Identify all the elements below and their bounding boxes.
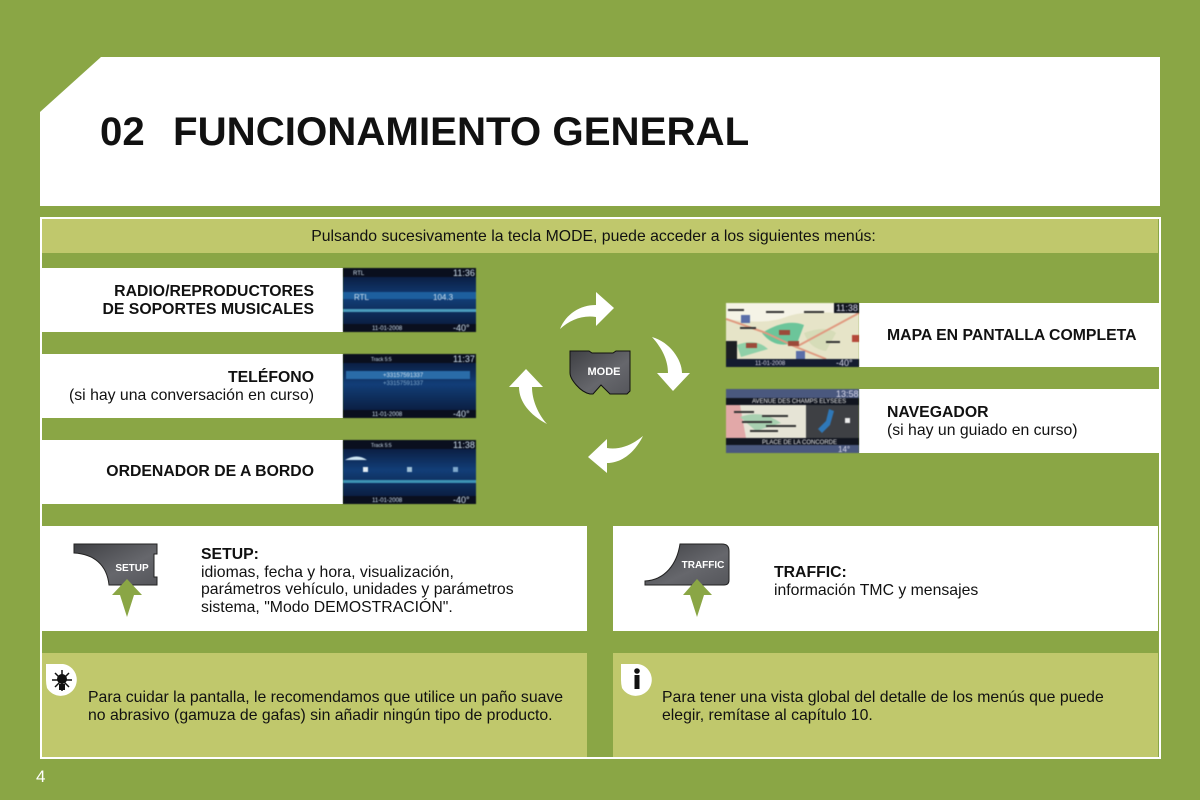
screen: radio: 104.3	[433, 293, 454, 302]
icon: MODE key	[570, 350, 630, 394]
mapa label: MAPA EN PANTALLA COMPLETA	[887, 327, 1137, 344]
ordenador label: ORDENADOR DE A BORDO	[106, 463, 314, 480]
panel: tip info	[613, 653, 1158, 757]
intro strip: Pulsando sucesivamente la tecla MODE, puede acceder a los siguientes menús:	[311, 228, 876, 245]
setup text: sistema, "Modo DEMOSTRACIÓN".	[201, 598, 453, 616]
panel: telefono	[42, 354, 343, 418]
screen: ordenador	[342, 439, 477, 505]
telefono label: TELÉFONO	[228, 369, 314, 386]
traffic text: información TMC y mensajes	[774, 582, 978, 598]
screen: ordenador: Track 5:5	[371, 443, 392, 449]
tip text: no abrasivo (gamuza de gafas) sin añadir ningún tipo de producto.	[88, 706, 553, 724]
icon: MODE key: MODE	[588, 366, 620, 378]
screen: navegador	[725, 388, 860, 454]
screen: navegador: AVENUE DES CHAMPS ELYSEES	[752, 399, 846, 405]
screen: radio: 11-01-2008	[372, 326, 403, 332]
icon: light	[46, 664, 77, 696]
telefono label: (si hay una conversación en curso)	[69, 386, 314, 404]
screen: mapa: 11:38	[836, 303, 858, 313]
panel: setup	[42, 526, 587, 631]
info text	[662, 689, 1104, 724]
setup text: parámetros vehículo, unidades y parámetros	[201, 581, 514, 598]
screen: ordenador: 11-01-2008	[372, 498, 403, 504]
icon: SETUP key with arrow: SETUP	[115, 563, 149, 574]
screen: navegador: 13:58	[836, 389, 859, 399]
icon: info	[621, 664, 652, 696]
screen: telefono: +33157591337	[383, 381, 424, 387]
traffic text	[774, 564, 978, 598]
screen: telefono: Track 5:5	[371, 357, 392, 363]
chapter number: 02	[100, 109, 145, 154]
header panel	[40, 57, 1160, 206]
radio label: DE SOPORTES MUSICALES	[102, 300, 314, 318]
radio label: RADIO/REPRODUCTORES	[114, 283, 314, 300]
info text: Para tener una vista global del detalle de los menús que puede	[662, 689, 1104, 706]
traffic text: TRAFFIC:	[774, 564, 847, 581]
navegador label	[887, 404, 1078, 438]
screen: radio: RTL	[354, 293, 370, 302]
screen: telefono: +33157591337	[383, 373, 424, 379]
setup text: SETUP:	[201, 546, 259, 563]
info text: elegir, remítase al capítulo 10.	[662, 706, 873, 724]
intro strip	[42, 219, 1158, 253]
screen: ordenador: 11:38	[453, 440, 475, 450]
screen: telefono: 11-01-2008	[372, 412, 403, 418]
screen: radio: 11:36	[453, 268, 475, 278]
icon: TRAFFIC key with arrow: TRAFFIC	[682, 560, 724, 571]
panel: radio	[42, 268, 343, 332]
screen: telefono	[342, 353, 477, 419]
setup text	[201, 546, 514, 616]
page number: 4	[36, 767, 45, 786]
panel: ordenador	[42, 440, 343, 504]
icon: TRAFFIC key with arrow	[644, 544, 730, 617]
tip text: Para cuidar la pantalla, le recomendamos que utilice un paño suave	[88, 689, 563, 706]
telefono label	[69, 368, 314, 404]
screen: navegador: PLACE DE LA CONCORDE	[762, 440, 837, 446]
radio label	[102, 283, 314, 318]
panel: mapa	[859, 303, 1160, 367]
title: FUNCIONAMIENTO GENERAL	[173, 109, 749, 154]
screen: radio: RTL	[353, 271, 365, 277]
panel: traffic	[613, 526, 1158, 631]
screen: radio	[342, 267, 477, 333]
panel: navegador	[859, 389, 1160, 453]
icon: SETUP key with arrow	[74, 544, 158, 617]
tip text	[88, 689, 563, 724]
screen: mapa	[725, 302, 860, 368]
navegador label: NAVEGADOR	[887, 404, 989, 421]
setup text: idiomas, fecha y hora, visualización,	[201, 564, 454, 580]
content frame	[40, 217, 1161, 759]
panel: tip screen care	[42, 653, 587, 757]
navegador label: (si hay un guiado en curso)	[887, 422, 1078, 438]
screen: telefono: 11:37	[453, 354, 475, 364]
icon: rotating arrows	[509, 292, 690, 473]
screen: mapa: 11-01-2008	[755, 361, 786, 367]
